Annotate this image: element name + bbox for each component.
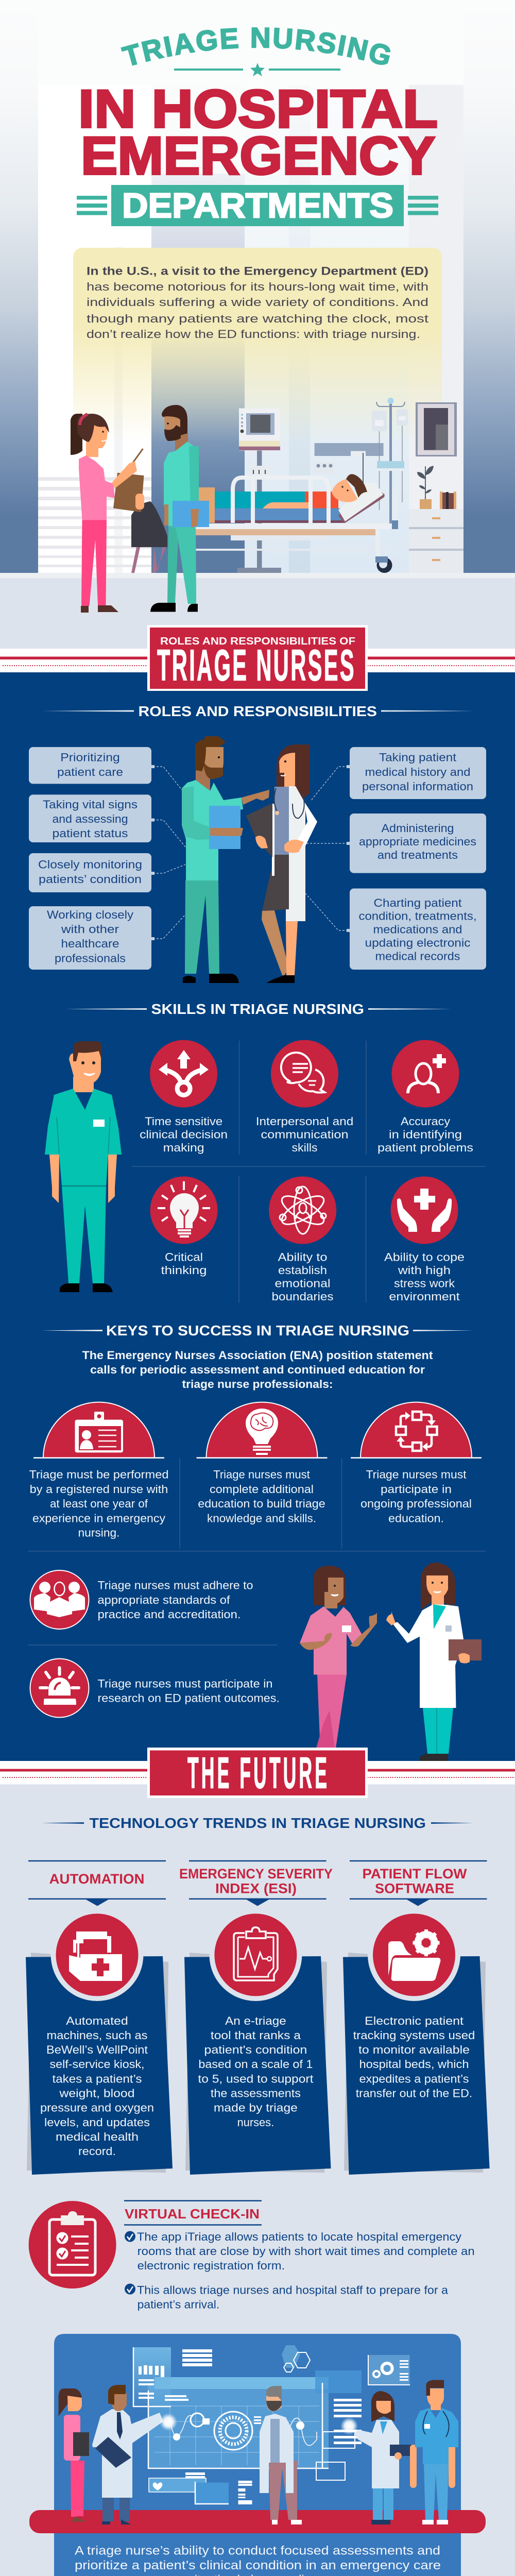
skill: critical thinking: Critical	[165, 1251, 203, 1264]
title: in hospital emergency: IN HOSPITAL	[78, 79, 438, 139]
requirement: standards of practice: Triage nurses must adhere to	[98, 1579, 253, 1592]
title: departments badge: DEPARTMENTS	[122, 186, 393, 225]
plant and books	[417, 466, 456, 509]
text: ENA position statement: triage nurse professionals:	[182, 1378, 333, 1391]
icon: medical folders	[56, 1913, 138, 1996]
doctor in white coat	[386, 1563, 482, 1761]
skill: critical thinking	[150, 1177, 217, 1277]
requirement: research on outcomes	[30, 1659, 280, 1718]
icon: team with light bulb	[30, 1570, 89, 1629]
text body: weight, blood	[59, 2087, 135, 2100]
section banner: the future	[147, 1748, 368, 1798]
text: ENA position statement: The Emergency Nurses Association (ENA) position statement	[82, 1349, 433, 1362]
icon: person with plus	[391, 1040, 459, 1108]
icon: alarm light	[30, 1659, 89, 1718]
card: working closely: healthcare	[61, 937, 119, 950]
text body: An e-triage	[225, 2014, 286, 2027]
skill: time sensitive clinical decision making: making	[163, 1141, 204, 1154]
card: charting patient condition: condition, treatments,	[358, 910, 477, 923]
requirement: additional education	[197, 1402, 328, 1525]
requirement: ongoing education: participate in	[381, 1483, 452, 1496]
title: triage nursing arc: TRIAGE NURSING	[121, 27, 390, 66]
bed with patient	[196, 474, 398, 573]
text body: medical health	[56, 2130, 139, 2143]
requirement: additional education: complete additional	[210, 1483, 314, 1496]
requirement: registered nurse: experience in emergency	[32, 1512, 165, 1525]
icon: IV pole and bags	[372, 398, 408, 524]
closing statement: prioritize a patient’s clinical condition in an emergency care	[75, 2558, 441, 2572]
card: charting patient condition: medical records	[375, 950, 460, 962]
card: closely monitoring	[29, 853, 151, 892]
navy section background	[0, 672, 515, 1761]
icon: light bulb	[150, 1177, 217, 1244]
card: taking patient medical history: Taking patient	[379, 751, 456, 764]
heading: skills in triage nursing	[63, 1001, 452, 1017]
illustration: female nurse with clipboard	[71, 414, 144, 613]
section banner: roles and responsibilities of triage nurses	[147, 625, 368, 691]
skill: ability to establish emotional boundaries: boundaries	[272, 1290, 334, 1303]
panel: closing illustration background	[54, 2334, 461, 2576]
skill: accuracy in identifying patient problems	[377, 1040, 473, 1154]
card: taking patient medical history	[350, 747, 486, 799]
text: ENA position statement	[82, 1349, 433, 1391]
illustration: digital interface	[133, 2345, 410, 2504]
column title: AUTOMATION	[49, 1871, 144, 1887]
pink nurse	[300, 1566, 377, 1752]
icon: vital signs monitor	[237, 408, 281, 573]
text body: pressure and oxygen	[40, 2102, 154, 2114]
skill: interpersonal and communication	[256, 1040, 353, 1154]
column: emergency severity index	[179, 1861, 333, 2175]
text body: tracking systems used	[353, 2029, 475, 2042]
glowing touch points	[160, 2413, 358, 2435]
heading: keys to success: KEYS TO SUCCESS IN TRIAGE NURSING	[106, 1323, 409, 1338]
card: taking vital signs: and assessing	[53, 812, 128, 825]
card: working closely: with other	[61, 923, 119, 936]
card: taking patient medical history: personal information	[362, 780, 473, 793]
panel: skills grid	[132, 1040, 486, 1303]
chair	[131, 501, 167, 573]
text body: Electronic patient	[365, 2014, 464, 2027]
text body	[40, 2014, 154, 2158]
text body: levels, and updates	[44, 2116, 150, 2129]
card: charting patient condition: Charting patient	[374, 896, 461, 909]
card: prioritizing patient care	[29, 747, 151, 784]
icon: brain light bulb in arch	[197, 1402, 328, 1458]
bullet: iTriage app: electronic registration form.	[138, 2259, 285, 2272]
card: working closely: Working closely	[47, 908, 133, 921]
intro text: don’t realize how the ED functions: with triage nursing.	[87, 328, 420, 341]
requirement: standards of practice: appropriate standards of	[98, 1594, 230, 1606]
person: female doctor with tablet	[354, 2391, 412, 2524]
text body	[353, 2014, 475, 2100]
icon: branching arrows	[150, 1040, 217, 1108]
illustration: male nurse reaching	[182, 736, 269, 983]
illustration: male nurse with folder	[150, 405, 209, 612]
requirement: additional education: Triage nurses must	[213, 1468, 310, 1481]
text body: made by triage	[214, 2102, 298, 2114]
text body: expedites a patient’s	[359, 2072, 469, 2085]
skill: ability to cope with high stress: environment	[389, 1290, 459, 1303]
skill: time sensitive clinical decision making: Time sensitive	[145, 1115, 222, 1128]
requirement: standards of practice: practice and accreditation.	[98, 1608, 241, 1621]
bullet: staff preparation	[125, 2283, 449, 2311]
text body: transfer out of the ED.	[356, 2087, 472, 2100]
requirement: additional education: knowledge and skills.	[207, 1512, 316, 1525]
requirement: ongoing education	[351, 1402, 482, 1525]
illustration: nurse in pink and doctor	[300, 1563, 482, 1761]
card: charting patient condition: medications and	[373, 923, 462, 936]
requirement: registered nurse	[29, 1402, 169, 1539]
requirement: additional education: education to build triage	[198, 1497, 325, 1510]
icon: ID badge in arch	[33, 1402, 164, 1458]
virtual check-in title	[124, 2201, 262, 2225]
icon: clipboard with heartbeat	[214, 1913, 297, 1996]
text body	[198, 2014, 313, 2129]
title: in hospital emergency	[78, 79, 438, 186]
requirement: registered nurse: at least one year of	[50, 1497, 148, 1510]
requirement: ongoing education: Triage nurses must	[366, 1468, 467, 1481]
skill: ability to cope with high stress	[384, 1177, 465, 1303]
skill: ability to cope with high stress: stress work	[394, 1277, 455, 1290]
panel: ENA requirements	[28, 1402, 486, 1551]
skill: ability to establish emotional boundaries: establish	[278, 1264, 327, 1277]
heading: keys to success	[41, 1323, 474, 1338]
requirement: research on outcomes: research on ED patient outcomes.	[98, 1692, 280, 1705]
column title: SOFTWARE	[375, 1880, 454, 1896]
section: virtual check-in	[29, 2201, 475, 2311]
bullet: iTriage app: rooms that are close by with short wait times and complete an	[138, 2245, 475, 2258]
band: roles section divider	[0, 649, 515, 672]
column: patient flow software	[343, 1861, 490, 2175]
skill: ability to establish emotional boundaries	[269, 1177, 336, 1303]
column title	[28, 1861, 166, 1906]
panel body	[26, 1908, 173, 2175]
card: administering medicines: appropriate medicines	[359, 835, 476, 848]
text body: record.	[78, 2145, 116, 2158]
requirement: ongoing education: education.	[388, 1512, 444, 1525]
intro panel background	[73, 248, 442, 443]
band: future section divider	[0, 1761, 515, 2576]
intro text	[87, 265, 428, 341]
heading: skills in triage nursing: SKILLS IN TRIAGE NURSING	[151, 1001, 364, 1017]
intro text: In the U.S., a visit to the Emergency Department (ED)	[87, 265, 428, 277]
section banner: roles and responsibilities of triage nurses: ROLES AND RESPONSIBILITIES OF	[160, 636, 355, 647]
panel: role cards, left	[29, 747, 151, 970]
requirement: registered nurse: by a registered nurse with	[30, 1483, 168, 1496]
text body: hospital beds, which	[359, 2058, 469, 2071]
text body: Automated	[66, 2014, 128, 2027]
card: charting patient condition: updating electronic	[365, 937, 471, 949]
column title: EMERGENCY SEVERITY	[179, 1866, 333, 1882]
card: taking vital signs: Taking vital signs	[43, 798, 138, 811]
skill: ability to establish emotional boundaries: emotional	[275, 1277, 331, 1290]
column title	[350, 1861, 487, 1906]
dashed connectors	[151, 767, 350, 939]
heading: roles and responsibilities	[41, 703, 474, 719]
card: charting patient condition	[350, 888, 486, 970]
card: closely monitoring: Closely monitoring	[38, 858, 142, 871]
bullet: staff preparation: patient’s arrival.	[138, 2298, 219, 2311]
text body: tool that ranks a	[211, 2029, 301, 2042]
illustration: female doctor	[246, 744, 317, 983]
person: senior doctor	[260, 2386, 302, 2524]
requirement: research on outcomes: Triage nurses must participate in	[98, 1677, 273, 1690]
column: automation	[26, 1861, 173, 2175]
heading: roles and responsibilities: ROLES AND RESPONSIBILITIES	[138, 703, 377, 719]
panel: role cards, right	[350, 747, 486, 970]
skill: ability to establish emotional boundaries: Ability to	[278, 1251, 328, 1264]
skill: time sensitive clinical decision making: clinical decision	[140, 1128, 228, 1141]
skill: ability to cope with high stress: Ability to cope	[384, 1251, 465, 1264]
person: doctor with stethoscope	[92, 2385, 163, 2524]
skill: accuracy in identifying patient problems: patient problems	[377, 1141, 473, 1154]
card: working closely	[29, 906, 151, 970]
intro text: has become notorious for its hours-long wait time, with	[87, 280, 428, 293]
panel body	[343, 1908, 490, 2175]
floor	[0, 573, 515, 650]
text: ENA position statement: calls for periodic assessment and continued education for	[90, 1363, 425, 1376]
skill: accuracy in identifying patient problems: in identifying	[389, 1128, 462, 1141]
icon: cycle of squares in arch	[351, 1402, 482, 1458]
illustration: hospital room equipment	[131, 398, 464, 573]
intro text: individuals suffering a wide variety of conditions. And	[87, 296, 428, 309]
text body: to monitor available	[358, 2043, 470, 2056]
skill: interpersonal and communication: communication	[261, 1128, 348, 1141]
bullet: staff preparation: This allows triage nurses and hospital staff to prepare for a	[137, 2283, 449, 2296]
star divider	[174, 63, 340, 76]
requirement: registered nurse: Triage must be performed	[29, 1468, 169, 1481]
column title: INDEX (ESI)	[215, 1880, 297, 1896]
card: administering medicines	[350, 814, 486, 873]
requirement: standards of practice	[30, 1570, 253, 1629]
illustration: medical team	[59, 2380, 458, 2524]
card: taking patient medical history: medical history and	[365, 766, 471, 778]
text body: the assessments	[211, 2087, 301, 2100]
card: administering medicines: Administering	[381, 822, 454, 835]
text body: machines, such as	[46, 2029, 147, 2042]
card: taking vital signs	[29, 794, 151, 842]
text body: self-service kiosk,	[49, 2058, 144, 2071]
text body: to 5, used to support	[198, 2072, 313, 2085]
title: in hospital emergency: EMERGENCY	[81, 126, 435, 186]
picture frame	[416, 402, 457, 456]
window blinds	[38, 477, 151, 567]
skill: ability to cope with high stress: with high	[398, 1264, 451, 1277]
wall panel and outlets	[314, 443, 384, 483]
bedside drawers	[409, 509, 464, 573]
bullet: iTriage app: The app iTriage allows patients to locate hospital emergency	[137, 2230, 461, 2243]
card: prioritizing patient care: Prioritizing	[60, 751, 120, 764]
illustration: standing nurse	[45, 1041, 122, 1292]
text body: based on a scale of 1	[198, 2058, 313, 2071]
virtual check-in title: VIRTUAL CHECK-IN	[125, 2206, 260, 2222]
skill: time sensitive clinical decision making	[140, 1040, 228, 1154]
text body: BeWell’s WellPoint	[46, 2043, 148, 2056]
person: female nurse	[59, 2388, 89, 2521]
bullet: iTriage app	[125, 2230, 475, 2272]
panel body	[184, 1908, 331, 2175]
red platform bar	[29, 2510, 486, 2533]
icon: folder with gear	[373, 1913, 455, 1996]
skill: accuracy in identifying patient problems: Accuracy	[401, 1115, 450, 1128]
card: closely monitoring: patients’ condition	[39, 873, 142, 886]
card: administering medicines: and treatments	[377, 849, 458, 861]
requirement: ongoing education: ongoing professional	[360, 1497, 472, 1510]
icon: checklist clipboard	[29, 2201, 116, 2289]
card: prioritizing patient care: patient care	[57, 766, 123, 778]
text body: nurses.	[237, 2116, 274, 2129]
icon: hands holding cross	[390, 1177, 458, 1244]
heading: technology trends: TECHNOLOGY TRENDS IN TRIAGE NURSING	[90, 1815, 426, 1831]
intro text: though many patients are watching the clock, most	[87, 312, 428, 325]
icon: chat bubbles	[271, 1040, 338, 1108]
skill: interpersonal and communication: Interpersonal and	[256, 1115, 353, 1128]
column title: PATIENT FLOW	[363, 1866, 467, 1882]
person: male nurse	[410, 2380, 458, 2524]
text body: takes a patient’s	[53, 2072, 142, 2085]
requirement: registered nurse: nursing.	[78, 1527, 119, 1539]
skill: interpersonal and communication: skills	[291, 1141, 317, 1154]
closing statement: A triage nurse’s ability to conduct focused assessments and	[75, 2544, 440, 2558]
icon: atom with person	[269, 1177, 336, 1244]
background: hospital room wall	[0, 0, 515, 573]
card: working closely: professionals	[55, 952, 126, 964]
text body: patient's condition	[204, 2043, 307, 2056]
closing statement	[75, 2544, 441, 2576]
column title	[179, 1861, 333, 1906]
skill: critical thinking: thinking	[161, 1264, 207, 1277]
title: departments badge	[77, 185, 438, 226]
card: taking vital signs: patient status	[53, 827, 128, 840]
